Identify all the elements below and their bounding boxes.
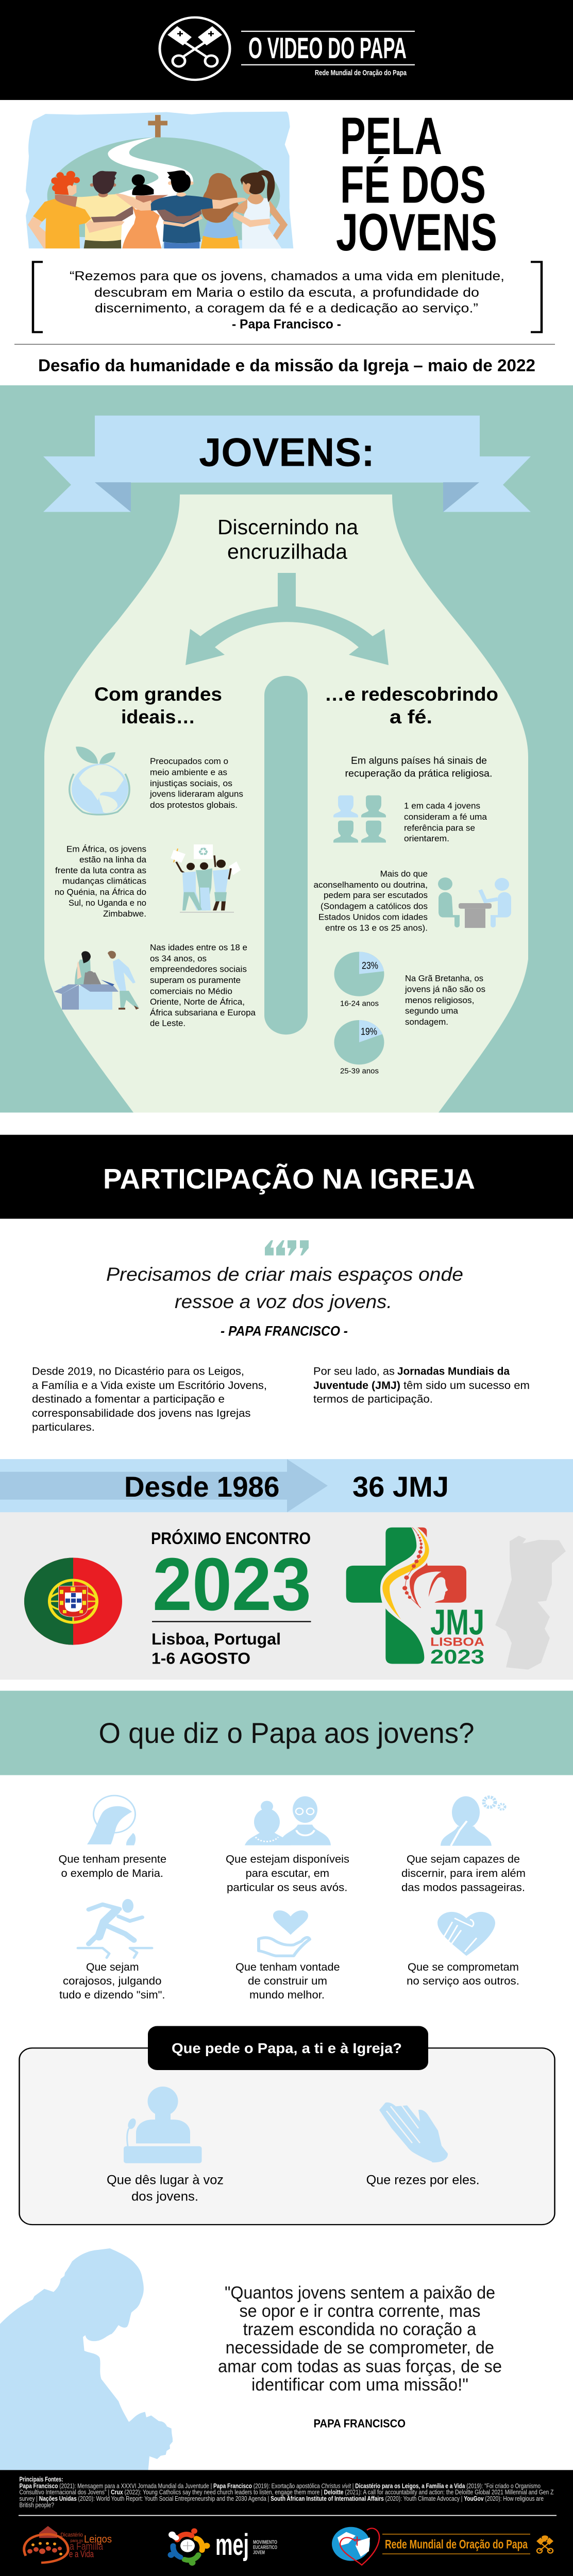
text: better world <box>235 1960 340 2001</box>
icon: thinker <box>441 1796 505 1846</box>
icon: four people <box>333 795 386 843</box>
text: courage: corajosos, julgando <box>63 1974 161 1987</box>
quote: spaces for young voices: ressoe a voz dos jovens. <box>175 1291 392 1313</box>
text: entrepreneurs: comerciais no Médio <box>150 986 232 996</box>
text: entrepreneurs: empreendedores sociais <box>150 964 247 974</box>
chart: pie 25-39: 19% <box>361 1026 377 1037</box>
icon: protesters with signs <box>171 844 241 912</box>
heading: discerning <box>217 516 359 564</box>
text: pray for them: Que rezes por eles. <box>366 2173 480 2187</box>
text: discern: discernir, para irem além <box>401 1867 526 1879</box>
prayer quote with brackets: descubram em Maria o estilo da escuta, a profundidade do <box>94 285 479 300</box>
text: entrepreneurs <box>150 943 256 1028</box>
logo: JMJ Lisboa 2023: JMJ <box>430 1602 484 1642</box>
quote: spaces for young voices: - PAPA FRANCISCO - <box>221 1324 348 1339</box>
text: environment: injustiças sociais, os <box>150 778 232 788</box>
text: grandparents: Que estejam disponíveis <box>226 1853 349 1865</box>
text: faith recovery: recuperação da prática religiosa. <box>345 768 493 779</box>
icon: volunteers packing a box <box>54 951 139 1010</box>
text: grandparents: para escutar, em <box>246 1867 329 1879</box>
text: grandparents <box>226 1853 349 1893</box>
sources: Principais Fontes: <box>20 2476 63 2483</box>
header band <box>0 0 573 100</box>
text: africa: Zimbabwe. <box>103 909 146 919</box>
text: africa: Sul, no Uganda e no <box>69 898 146 908</box>
heading: right column: a fé. <box>390 706 432 727</box>
prayer quote with brackets <box>33 262 542 332</box>
text: africa: no Quénia, na África do <box>55 887 146 897</box>
ribbon banner: JOVENS: <box>199 430 375 474</box>
sources: survey | Nações Unidas (2020): World Youth Report: Youth Social Entrepreneurship and the 2030 Agenda | South African Institute of International Affairs (2020): Youth Climate Advocacy | YouGov (2020): How religious are <box>20 2495 544 2502</box>
section heading: what the pope says: O que diz o Papa aos jovens? <box>99 1718 474 1749</box>
section heading: what the pope says <box>0 1691 573 1775</box>
icon: grandparents <box>245 1796 331 1845</box>
banner: since 1986: Desde 1986 <box>124 1471 279 1503</box>
quote: how many young people: identificar com uma missão!" <box>251 2375 468 2394</box>
center divider pill <box>264 676 308 1035</box>
text: environment: dos protestos globais. <box>150 800 238 810</box>
title: FÉ DOS <box>340 155 486 214</box>
chart: pie 16-24: 16-24 anos <box>340 999 379 1008</box>
icon: mary <box>87 1795 136 1845</box>
text: next encounter details: PRÓXIMO ENCONTRO <box>151 1530 311 1548</box>
text: africa: frente da luta contra as <box>55 866 146 875</box>
text: faith recovery: Em alguns países há sinais de <box>351 755 487 766</box>
text: listening: Estados Unidos com idades <box>318 912 428 922</box>
text: africa: Em África, os jovens <box>66 844 146 854</box>
prayer quote with brackets: - Papa Francisco - <box>232 317 341 331</box>
icon: praying hands <box>379 2103 448 2162</box>
text: world youth days: Jornadas Mundiais da <box>397 1365 510 1377</box>
text: youth office: Desde 2019, no Dicastério para os Leigos, <box>32 1365 244 1377</box>
panel: bottle shape <box>44 495 528 1112</box>
text: mary <box>59 1853 166 1879</box>
text: courage <box>59 1960 165 2001</box>
text: world youth days: têm sido um sucesso em <box>403 1379 530 1392</box>
logo: mej: JOVEM <box>253 2550 265 2555</box>
quote: how many young people: "Quantos jovens sentem a paixão de <box>225 2282 495 2302</box>
illustration: young people looking at the cross on the hill <box>26 112 293 248</box>
text: give voice <box>107 2173 224 2204</box>
banner: since 1986 <box>0 1459 573 1512</box>
quote: how many young people: se opor e ir contra corrente, mas <box>239 2301 480 2320</box>
text: listening: (Sondagem a católicos dos <box>321 902 428 911</box>
text: world youth days: Juventude (JMJ) <box>313 1379 400 1392</box>
text: courage: tudo e dizendo "sim". <box>59 1988 165 2001</box>
text: entrepreneurs: os 34 anos, os <box>150 954 207 963</box>
text: youth office: a Família e a Vida existe um Escritório Jovens, <box>32 1379 267 1392</box>
text: environment: Preocupados com o <box>150 756 228 766</box>
sources <box>20 2476 553 2509</box>
text: entrepreneurs: África subsariana e Europa <box>150 1008 256 1018</box>
text: discern <box>401 1853 526 1893</box>
footer <box>0 2470 573 2576</box>
text: faith recovery <box>345 755 493 779</box>
icon: speaker at lectern <box>124 2087 202 2163</box>
panel title: Que pede o Papa, a ti e à Igreja? <box>172 2041 402 2057</box>
text: environment <box>149 756 243 810</box>
text: next encounter details: 1-6 AGOSTO <box>151 1650 250 1668</box>
text: environment: meio ambiente e as <box>150 768 227 777</box>
text: world youth days: termos de participação. <box>313 1393 433 1405</box>
quote: how many young people: PAPA FRANCISCO <box>313 2418 406 2430</box>
text: service <box>407 1960 519 1987</box>
quote: spaces for young voices: Precisamos de criar mais espaços onde <box>106 1264 463 1285</box>
logo: JMJ Lisboa 2023 <box>346 1528 484 1668</box>
text: courage: Que sejam <box>86 1960 139 1973</box>
text: great britain: segundo uma <box>405 1006 458 1015</box>
icon: quotation marks <box>265 1240 309 1256</box>
chart: pie 16-24: 23% <box>362 960 378 971</box>
text: great britain: menos religiosos, <box>405 995 474 1005</box>
heading: discerning: encruzilhada <box>227 540 348 564</box>
quote: how many young people: trazem escondida no coração a <box>243 2319 476 2339</box>
text: listening: pedem para ser escutados <box>324 890 428 900</box>
text: one in four: referência para se <box>404 823 475 833</box>
title: JOVENS <box>336 203 497 262</box>
icon: runner jumping <box>78 1899 152 1958</box>
text: world youth days <box>313 1365 530 1405</box>
heading: left column: ideais… <box>121 706 195 727</box>
text: africa: estão na linha da <box>79 855 146 865</box>
heading: left column <box>94 684 222 727</box>
text: entrepreneurs: Nas idades entre os 18 e <box>150 943 247 952</box>
text: better world: de construir um <box>248 1974 327 1987</box>
text: listening: entre os 13 e os 25 anos). <box>325 923 428 933</box>
logo: prayer network <box>332 2527 553 2565</box>
icon: conversation at a table <box>438 877 511 928</box>
quote: spaces for young voices <box>106 1264 463 1339</box>
text: give voice: dos jovens. <box>131 2189 198 2204</box>
quote: how many young people: necessidade de se comprometer, de <box>226 2337 494 2358</box>
section heading: participation: PARTICIPAÇÃO NA IGREJA <box>103 1164 475 1195</box>
text: great britain: Na Grã Bretanha, os <box>405 973 483 983</box>
banner: since 1986: 36 JMJ <box>352 1471 449 1503</box>
text: next encounter details <box>151 1530 311 1668</box>
text: service: no serviço aos outros. <box>407 1974 519 1987</box>
text: better world: mundo melhor. <box>249 1988 325 2001</box>
ribbon banner <box>43 416 531 512</box>
text: great britain: sondagem. <box>405 1017 448 1027</box>
text: youth office: destinado a fomentar a participação e <box>32 1393 225 1405</box>
chart: pie 16-24 <box>334 952 384 1008</box>
text: better world: Que tenham vontade <box>235 1960 340 1973</box>
icon: heart of joined hands <box>437 1912 495 1956</box>
brand name: Rede Mundial de Oração do Papa <box>315 69 407 77</box>
text: entrepreneurs: superam os puramente <box>150 975 241 985</box>
heading: right column <box>325 684 498 727</box>
prayer quote with brackets: discernimento, a coragem da fé e a dedicação ao serviço.” <box>95 301 478 315</box>
logo: dicastery: Dicastério <box>60 2532 83 2538</box>
title <box>336 107 497 262</box>
text: one in four <box>404 801 487 843</box>
icon: heart over hand <box>259 1910 310 1956</box>
icon: globe with leaves <box>70 747 129 815</box>
text: service: Que se comprometam <box>408 1960 519 1973</box>
panel: next encounter <box>0 1512 573 1680</box>
brand name <box>241 31 415 77</box>
logo: dicastery: a Família <box>70 2540 104 2552</box>
text: one in four: consideram a fé uma <box>404 812 487 822</box>
text: discern: das modos passageiras. <box>401 1881 525 1893</box>
icon: portuguese flag <box>24 1558 122 1645</box>
logo: dicastery: Leigos <box>84 2533 112 2545</box>
heading: left column: Com grandes <box>94 684 222 705</box>
text: environment: jovens lideraram alguns <box>149 789 243 799</box>
text: mary: Que tenham presente <box>59 1853 166 1865</box>
sources: Papa Francisco (2021): Mensagem para a XXXVI Jornada Mundial da Juventude | Papa Francisco (2019): Exortação apostólica Christus vivit | Dicastério para os Leigos, a Família e a Vida (2019): "Foi criado o Organismo <box>20 2482 541 2489</box>
text: listening: aconselhamento ou doutrina, <box>313 880 428 890</box>
sources: British people? <box>20 2501 54 2509</box>
icon: crossed keys logo <box>160 18 230 80</box>
text: next encounter details: Lisboa, Portugal <box>151 1631 281 1648</box>
text: give voice: Que dês lugar à voz <box>107 2173 224 2187</box>
text: one in four: 1 em cada 4 jovens <box>404 801 480 810</box>
icon: protesters with signs: ♻ <box>198 846 209 858</box>
logo: dicastery: e a Vida <box>69 2549 94 2560</box>
section heading: participation <box>0 1135 573 1219</box>
text: youth office: corresponsabilidade dos jovens nas Igrejas <box>32 1406 250 1419</box>
text: great britain <box>405 973 485 1027</box>
text: youth office: particulares. <box>32 1420 95 1433</box>
panel title <box>148 2026 428 2070</box>
logo: JMJ Lisboa 2023: 2023 <box>430 1646 484 1668</box>
logo: mej: mej <box>215 2528 249 2562</box>
title: PELA <box>340 107 442 166</box>
text: africa: mudanças climáticas <box>62 876 146 886</box>
arrow: forked <box>186 573 389 665</box>
logo: dicastery <box>24 2526 112 2563</box>
quote: how many young people: amar com todas as suas forças, de se <box>218 2356 502 2376</box>
icon: portugal map <box>495 1536 566 1670</box>
heading: right column: …e redescobrindo <box>325 684 498 705</box>
silhouette: pope francis praying <box>0 2248 173 2470</box>
logo: JMJ Lisboa 2023: LISBOA <box>430 1636 484 1649</box>
panel: what the pope asks <box>20 2026 554 2225</box>
prayer quote with brackets: “Rezemos para que os jovens, chamados a uma vida em plenitude, <box>70 268 504 283</box>
brand name: O VIDEO DO PAPA <box>248 31 407 65</box>
text: entrepreneurs: de Leste. <box>150 1019 186 1028</box>
text: listening <box>313 869 428 933</box>
text: listening: Mais do que <box>380 869 428 878</box>
panel: jovens green section <box>0 385 573 1112</box>
heading: discerning: Discernindo na <box>217 516 359 539</box>
logo: dicastery: para os <box>71 2538 83 2543</box>
text: youth office <box>32 1365 267 1433</box>
text: great britain: jovens já não são os <box>405 985 485 994</box>
quote: how many young people <box>218 2282 502 2430</box>
text: entrepreneurs: Oriente, Norte de África, <box>150 997 245 1007</box>
logo: mej: EUCARÍSTICO <box>253 2544 277 2550</box>
chart: pie 25-39 <box>334 1020 384 1075</box>
text: next encounter details: 2023 <box>153 1542 311 1626</box>
chart: pie 25-39: 25-39 anos <box>340 1066 379 1075</box>
text: one in four: orientarem. <box>404 834 449 843</box>
text: world youth days: Por seu lado, as <box>313 1365 395 1377</box>
logo: mej: MOVIMENTO <box>253 2539 277 2545</box>
text: africa <box>55 844 146 919</box>
text: grandparents: particular os seus avós. <box>227 1881 348 1893</box>
text: discern: Que sejam capazes de <box>407 1853 520 1865</box>
logo: mej <box>168 2528 277 2566</box>
text: mary: o exemplo de Maria. <box>61 1867 163 1879</box>
